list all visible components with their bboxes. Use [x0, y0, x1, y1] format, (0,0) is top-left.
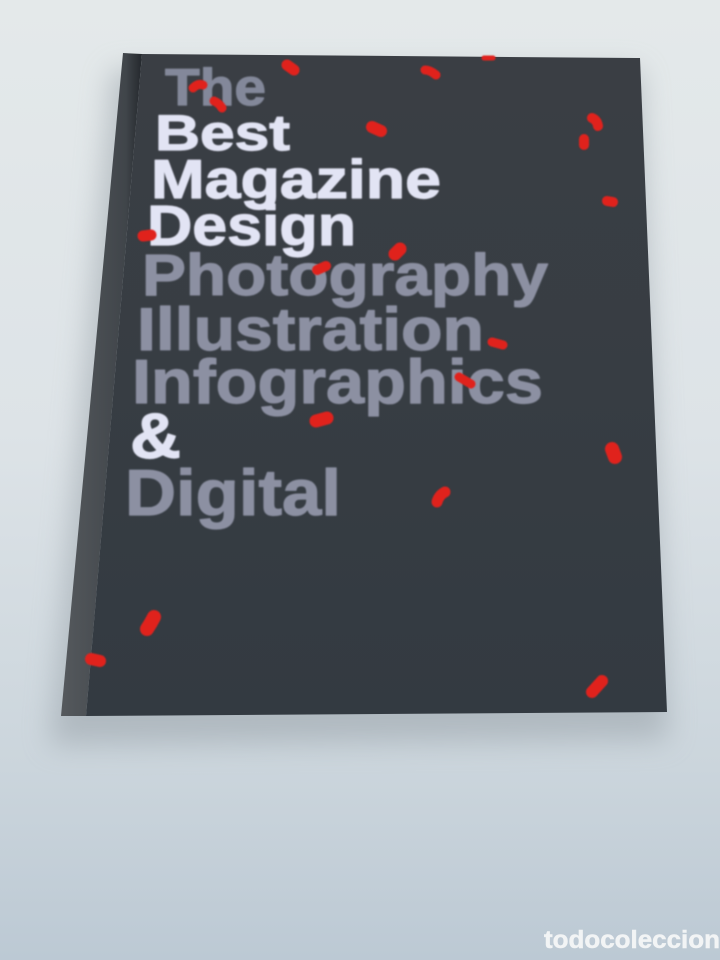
title line: The: The: [165, 59, 266, 117]
title line: Illustration: Illustration: [137, 296, 484, 363]
title line: Digital: Digital: [125, 456, 341, 529]
title line: Design: Design: [147, 194, 356, 258]
title line: Best: Best: [155, 105, 290, 161]
title line: ampersand: &: [130, 400, 181, 472]
title line: Photography: Photography: [142, 243, 548, 308]
book spine: [61, 53, 142, 716]
red jelly bean shapes: [91, 58, 615, 692]
watermark: todocoleccion: [544, 926, 720, 954]
title line: Magazine: Magazine: [151, 148, 441, 210]
title line: Infographics: Infographics: [132, 348, 543, 417]
book front cover: [86, 54, 667, 716]
book shadow: [50, 70, 668, 745]
cover title: [125, 59, 548, 529]
